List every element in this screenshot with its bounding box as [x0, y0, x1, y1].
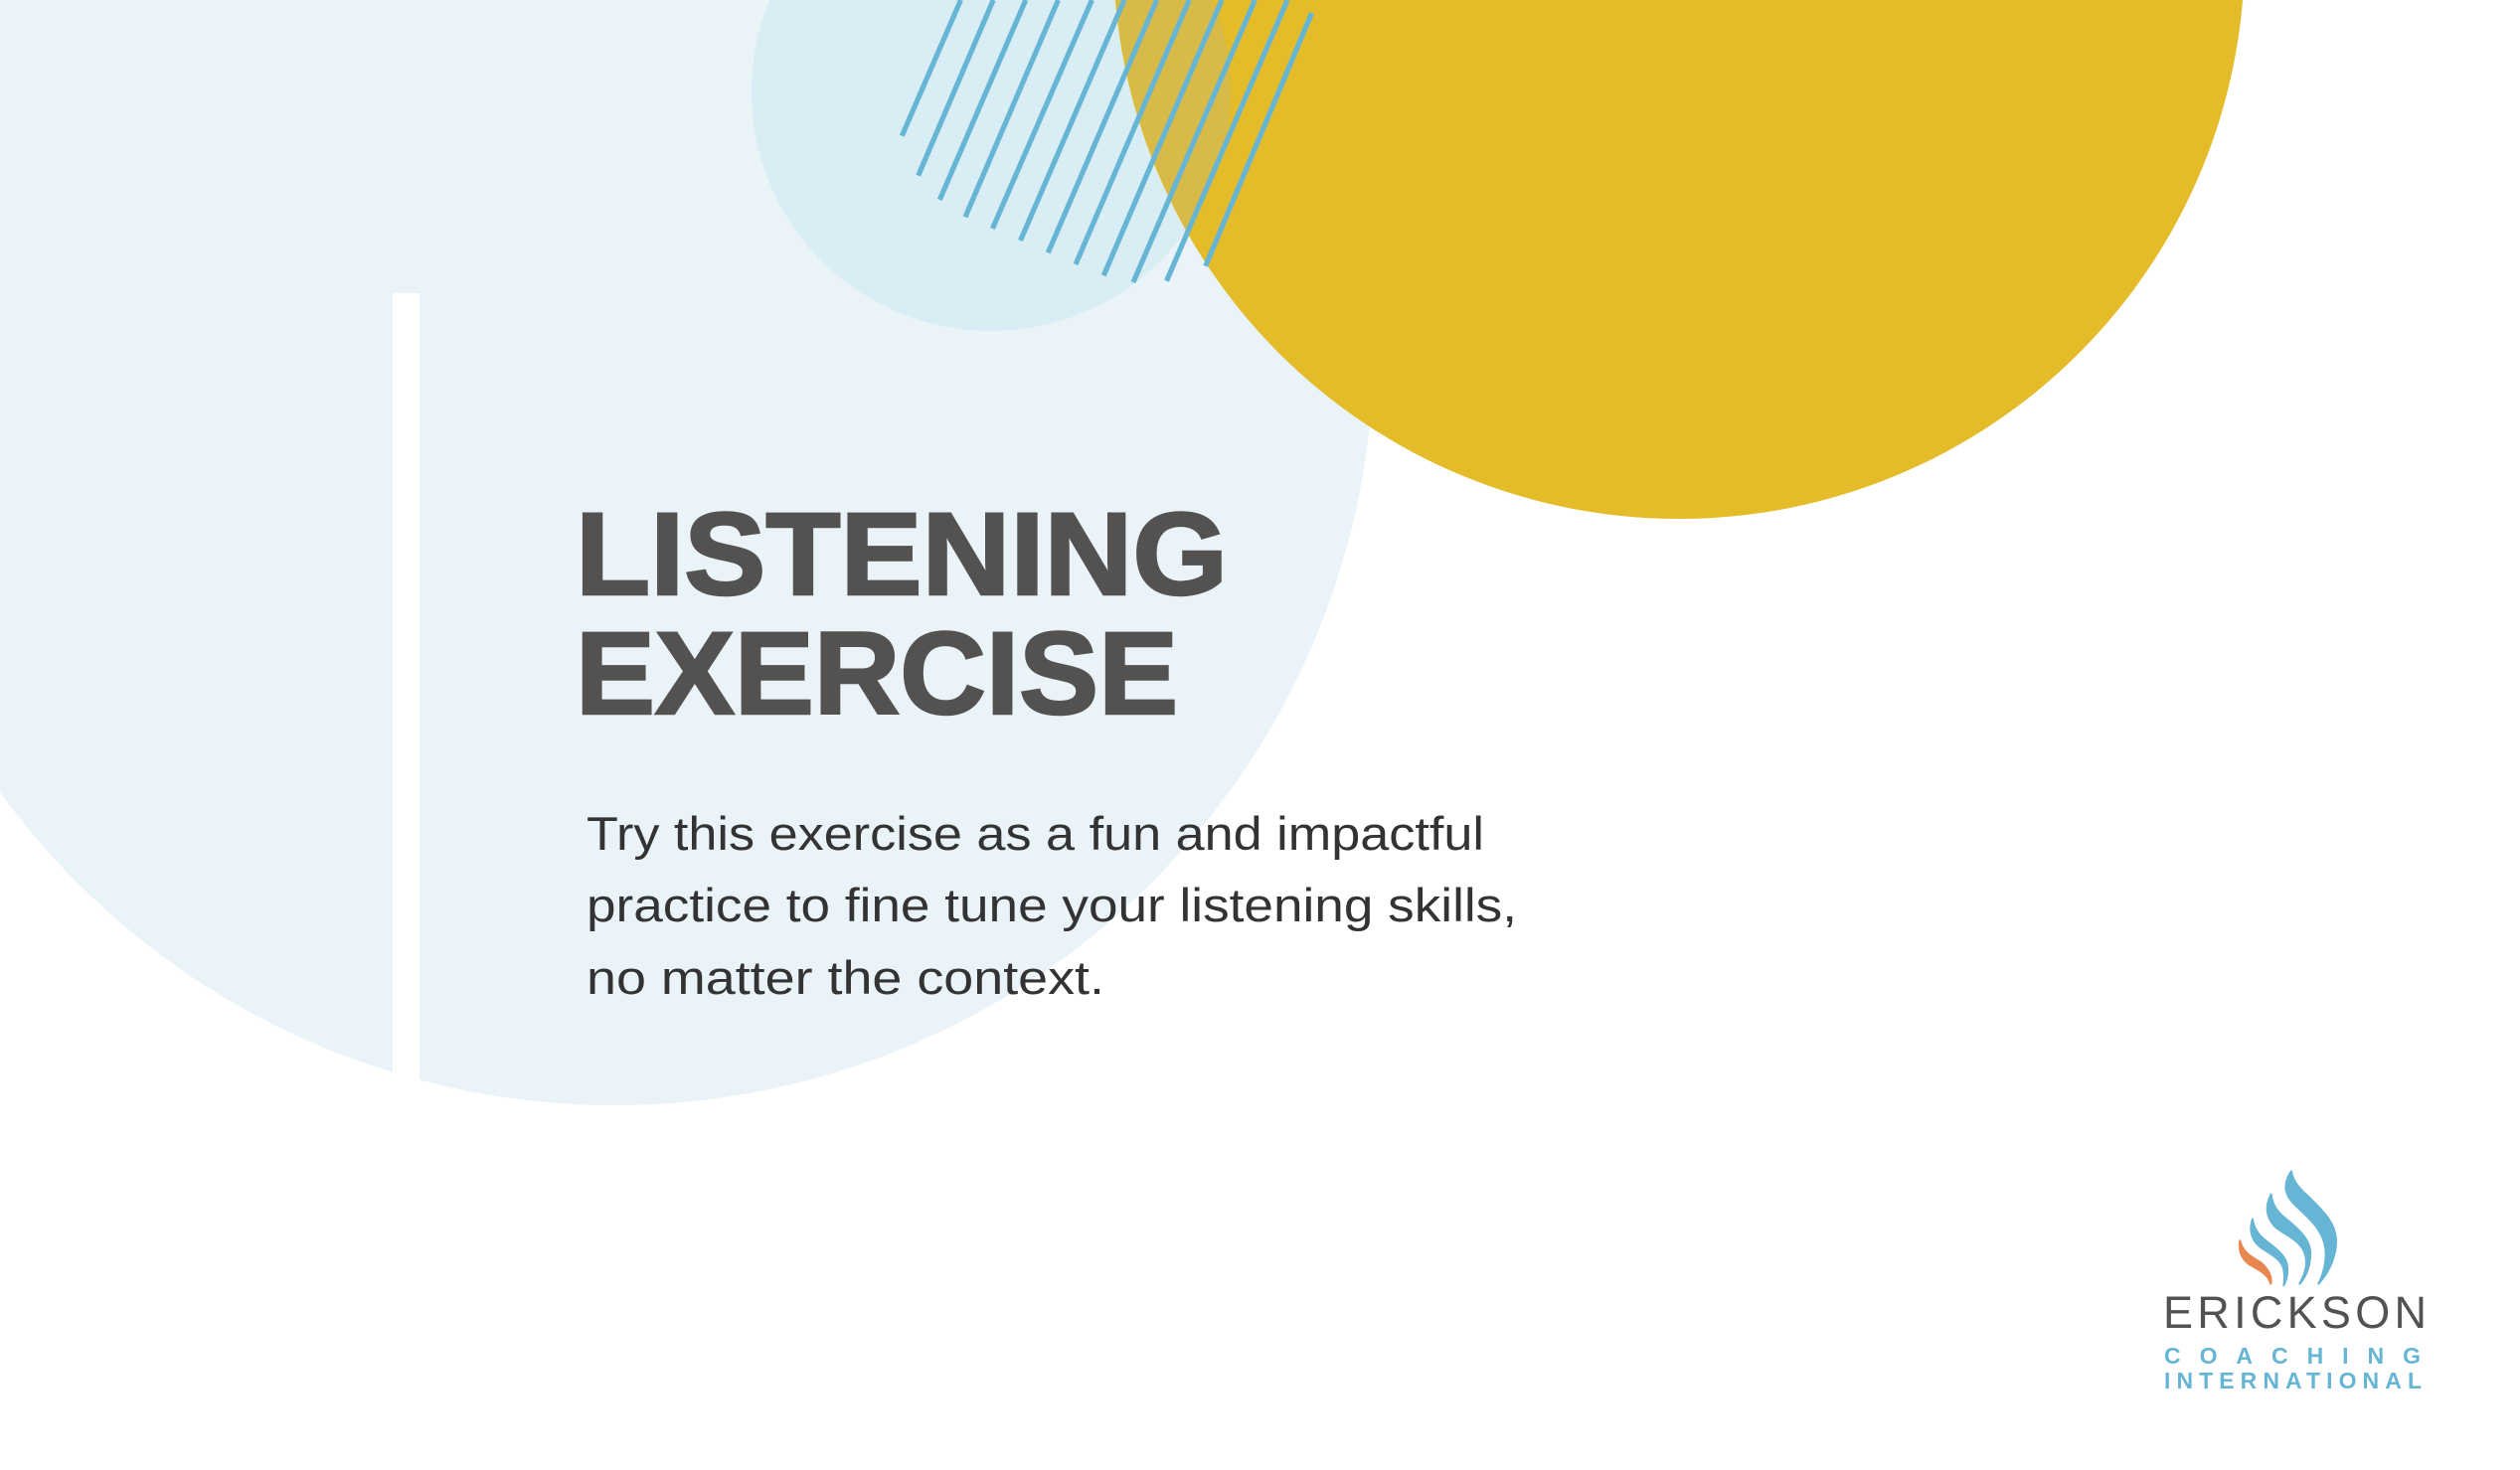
diagonal hatch lines	[902, 0, 1312, 282]
logo: Erickson Coaching International	[2163, 1171, 2427, 1393]
small pale teal circle	[752, 0, 1231, 331]
large pale blue background circle	[0, 0, 1374, 1105]
logo wordmark: ERICKSON	[2163, 1287, 2427, 1338]
intro text: practice to fine tune your listening skills,	[587, 880, 1517, 932]
intro text	[587, 808, 1517, 1005]
circle overlap tint	[1116, 0, 1231, 229]
intro text: no matter the context.	[587, 952, 1104, 1005]
title: EXERCISE	[576, 608, 1178, 739]
title	[576, 489, 1228, 739]
logo line: coaching: COACHING	[2164, 1343, 2421, 1369]
white vertical bar	[393, 293, 420, 1118]
title: LISTENING	[576, 489, 1228, 620]
large yellow circle	[1113, 0, 2245, 519]
logo line: international: INTERNATIONAL	[2164, 1368, 2422, 1393]
icon: flame mark	[2240, 1171, 2336, 1285]
intro text: Try this exercise as a fun and impactful	[587, 808, 1484, 861]
